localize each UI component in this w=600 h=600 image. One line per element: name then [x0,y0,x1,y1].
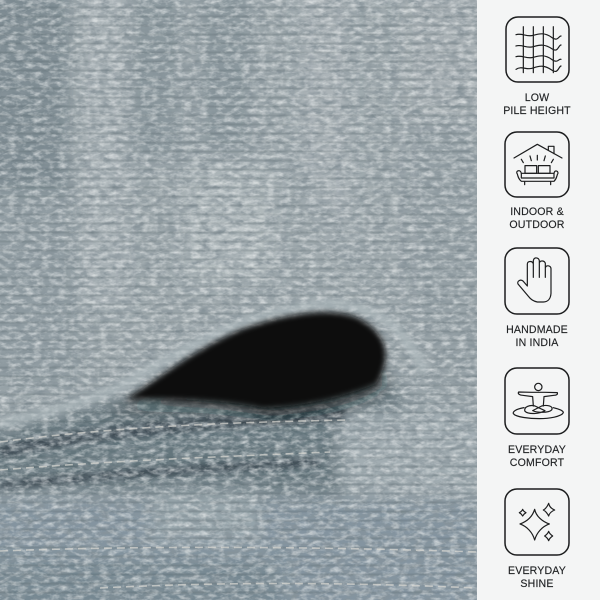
label: indoor and outdoor: INDOOR & [510,206,564,218]
woven texture [0,0,478,600]
label: low pile height: LOW [525,92,549,104]
folded flap [0,0,345,318]
flap lip [0,305,425,424]
label: low pile height: PILE HEIGHT [503,105,571,117]
icon: handmade hand [505,248,569,314]
icon: indoor and outdoor [505,132,569,197]
label: everyday shine: SHINE [520,578,554,590]
panel: icon sidebar [477,0,600,600]
dark hollow under fold [125,312,386,408]
lower rug layer [0,385,480,600]
label: everyday shine: EVERYDAY [508,565,566,577]
icon: everyday shine sparkles [505,489,569,555]
label: handmade in india: IN INDIA [516,337,559,349]
icon: low pile height [506,17,569,82]
dark woven stripes of lower layer [0,414,345,486]
shadow over lower layer below hollow [100,370,385,416]
label: handmade in india: HANDMADE [506,324,568,336]
label: everyday comfort: COMFORT [510,457,565,469]
label: everyday comfort: EVERYDAY [508,444,566,456]
icon: everyday comfort meditation [505,368,569,434]
cream stitch lines [0,420,478,588]
label: indoor and outdoor: OUTDOOR [509,219,565,231]
back rug layer [292,0,477,230]
